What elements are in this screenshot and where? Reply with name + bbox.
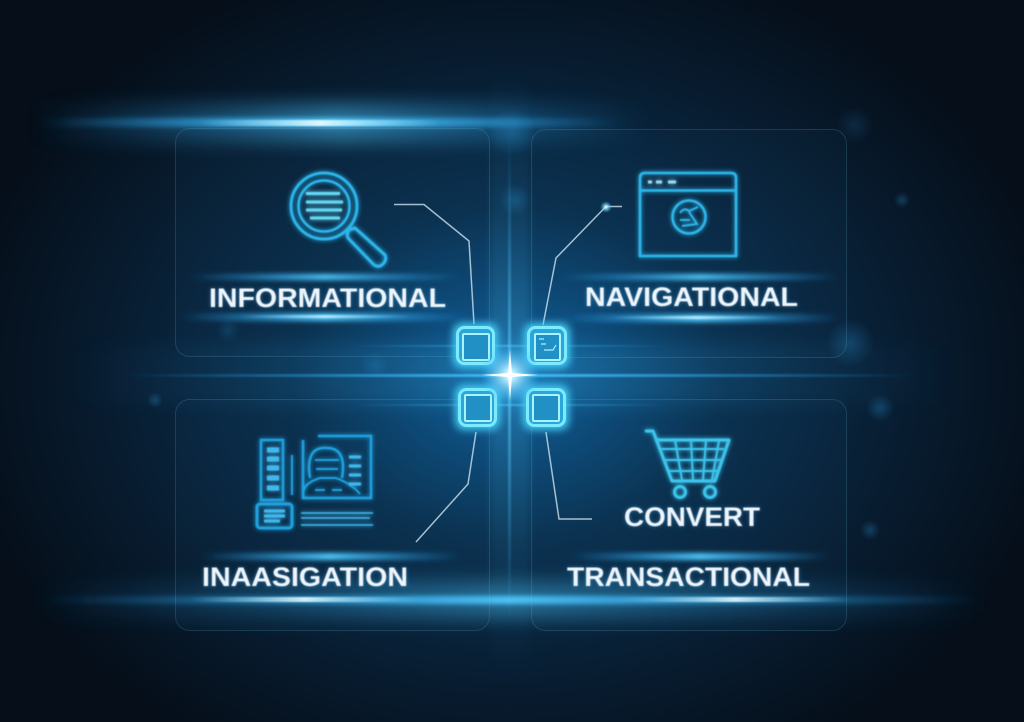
panel: transactional	[532, 400, 846, 630]
connector line	[394, 204, 474, 324]
node: bottom right	[523, 385, 569, 430]
icon: magnifying glass	[291, 173, 386, 266]
panel frame	[176, 400, 490, 630]
node: top left	[453, 323, 498, 368]
panel frame	[532, 400, 846, 630]
central node cluster	[453, 323, 570, 430]
panel: informational	[176, 128, 490, 356]
connector line	[416, 432, 476, 542]
node: bottom left	[455, 385, 500, 430]
panel frame	[176, 128, 490, 356]
central horizontal light beams	[60, 345, 960, 406]
icon: profile dashboard	[257, 436, 373, 528]
heading: NAVIGATIONAL	[585, 282, 798, 312]
central vertical light beam	[490, 60, 530, 680]
heading glow bar	[200, 553, 460, 560]
heading glow bars	[560, 274, 840, 322]
node: top right	[524, 323, 570, 368]
panel: investigation	[176, 400, 490, 630]
heading glow bars	[180, 274, 470, 321]
central star flare	[480, 345, 540, 405]
connector light point	[600, 201, 612, 213]
heading: INFORMATIONAL	[209, 283, 446, 313]
icon: shopping cart	[645, 431, 729, 498]
ambient light spots	[147, 107, 910, 540]
panel frame	[532, 130, 846, 358]
panel: navigational	[532, 130, 846, 358]
bottom light streak	[30, 582, 990, 618]
connector line	[546, 432, 592, 519]
heading: INAASIGATION	[202, 562, 408, 592]
subheading: CONVERT	[624, 502, 760, 532]
top light streak	[30, 104, 650, 142]
icon: browser window	[640, 173, 736, 256]
heading: TRANSACTIONAL	[567, 562, 810, 592]
connector line	[543, 206, 622, 325]
heading glow bar	[570, 553, 830, 560]
